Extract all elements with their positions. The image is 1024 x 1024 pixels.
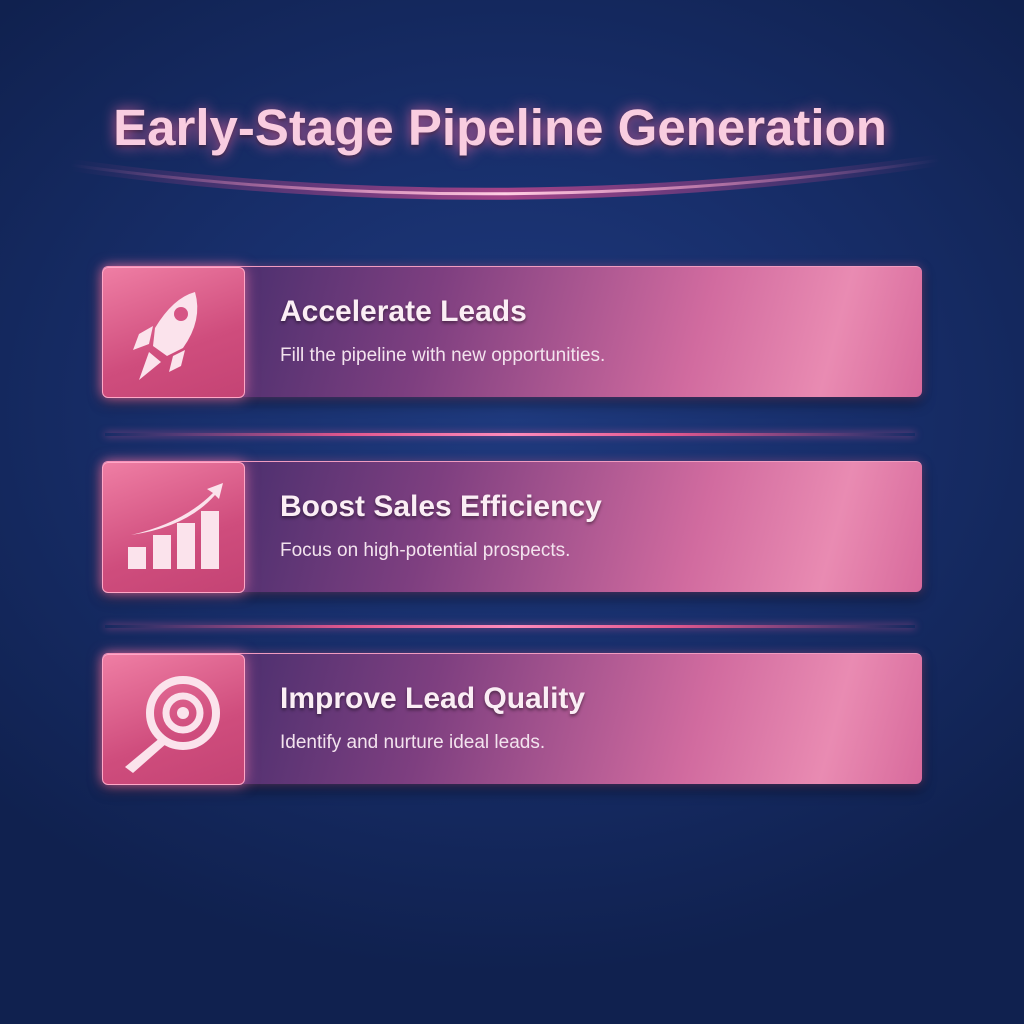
card 2: boost sales efficiency: Focus on high-potential prospects. xyxy=(280,540,570,561)
glow underline xyxy=(80,158,930,200)
card 1: accelerate leads: Fill the pipeline with new opportunities. xyxy=(280,345,605,366)
card 2: boost sales efficiency xyxy=(102,461,922,592)
icon: bar chart with arrow xyxy=(102,462,245,593)
card 1: accelerate leads xyxy=(102,266,922,397)
card 1: accelerate leads: Accelerate Leads xyxy=(280,295,527,328)
card 2: boost sales efficiency: Boost Sales Efficiency xyxy=(280,490,602,523)
card 3: improve lead quality xyxy=(102,653,922,784)
card 3: improve lead quality: Improve Lead Quality xyxy=(280,682,585,715)
card 3: improve lead quality: Identify and nurture ideal leads. xyxy=(280,732,545,753)
icon: target magnifier xyxy=(102,654,245,785)
icon: rocket xyxy=(102,267,245,398)
title: Early-Stage Pipeline Generation xyxy=(113,99,887,156)
